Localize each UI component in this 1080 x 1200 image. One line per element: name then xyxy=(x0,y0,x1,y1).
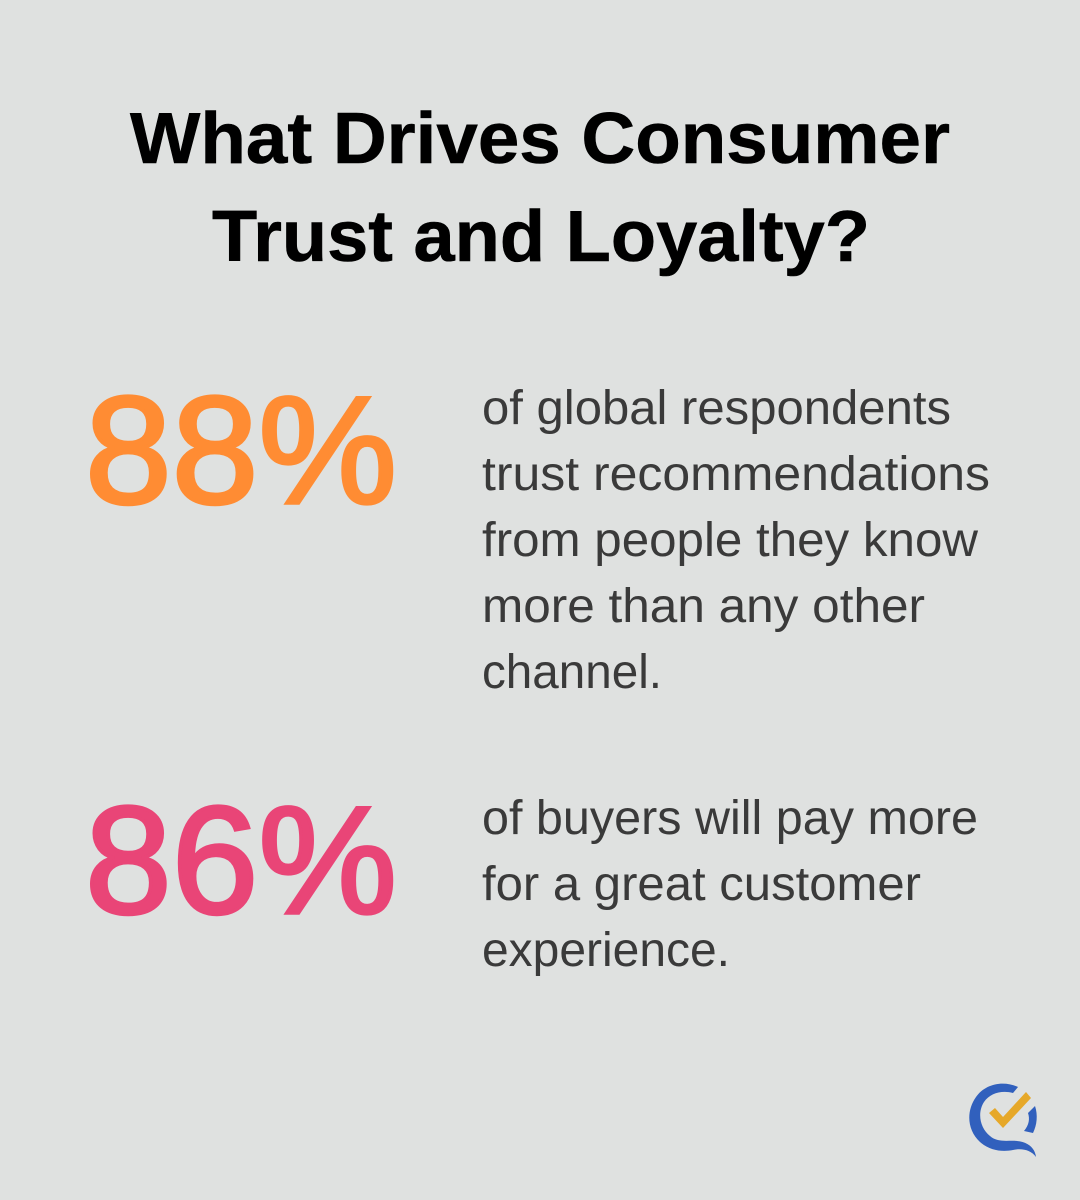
stat number: 88%: 88% xyxy=(85,365,397,536)
text block: 88% description xyxy=(482,382,990,699)
text block: 88% description: more than any other xyxy=(482,580,925,633)
panel: 86% statistic xyxy=(85,775,978,977)
text block: 86% description xyxy=(482,792,978,977)
text block: 88% description: from people they know xyxy=(482,514,978,567)
stat number: 86%: 86% xyxy=(85,775,397,946)
text block: 88% description: channel. xyxy=(482,646,662,699)
title: What Drives Consumer xyxy=(130,99,950,179)
panel: 88% statistic xyxy=(85,365,990,699)
text block: 86% description: of buyers will pay more xyxy=(482,792,978,845)
title: Trust and Loyalty? xyxy=(212,197,870,277)
text block: 88% description: of global respondents xyxy=(482,382,951,435)
icon: logo speech bubble with check mark xyxy=(969,1084,1037,1157)
text block: 86% description: for a great customer xyxy=(482,858,921,911)
title xyxy=(130,99,950,277)
text block: 88% description: trust recommendations xyxy=(482,448,990,501)
text block: 86% description: experience. xyxy=(482,924,730,977)
